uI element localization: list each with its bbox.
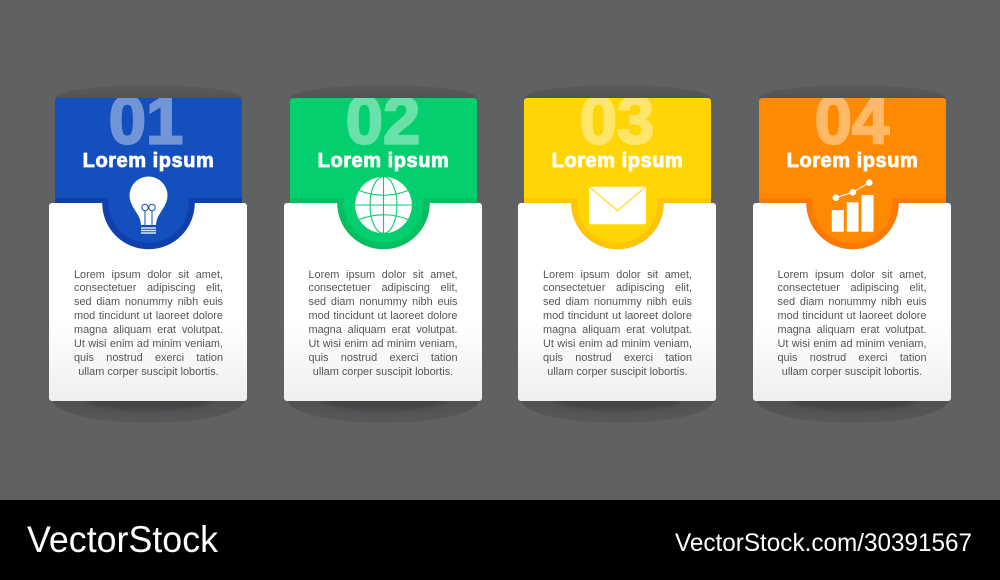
body text: Lorem ipsum dolor sit amet,	[778, 268, 926, 280]
body text: sed diam nonummy nibh euis	[74, 296, 223, 308]
body text: Ut wisi enim ad minim veniam,	[308, 338, 458, 350]
body text	[308, 268, 458, 378]
panel: card 02	[284, 88, 482, 422]
heading: Lorem ipsum	[83, 150, 214, 172]
heading: Lorem ipsum	[552, 150, 683, 172]
number 03: 03	[580, 84, 654, 158]
brand name: VectorStock	[27, 519, 218, 560]
body text: consectetuer adipiscing elit,	[74, 282, 223, 294]
body text: consectetuer adipiscing elit,	[308, 282, 458, 294]
body text: mod tincidunt ut laoreet dolore	[543, 310, 692, 322]
image url: VectorStock.com/30391567	[675, 529, 972, 557]
heading: Lorem ipsum	[786, 150, 918, 172]
body text: consectetuer adipiscing elit,	[778, 282, 926, 294]
body text: consectetuer adipiscing elit,	[543, 282, 692, 294]
body text: sed diam nonummy nibh euis	[778, 296, 926, 308]
body text: sed diam nonummy nibh euis	[543, 296, 692, 308]
body text: ullam corper suscipit lobortis.	[313, 366, 453, 378]
footer bar: watermark	[0, 500, 1000, 580]
number 04: 04	[814, 84, 889, 158]
body text: magna aliquam erat volutpat.	[543, 324, 692, 336]
panel: card 03	[518, 88, 716, 422]
white body panel	[284, 203, 482, 401]
panel: card 04	[753, 88, 951, 422]
body text: Lorem ipsum dolor sit amet,	[308, 268, 458, 280]
body text: Ut wisi enim ad minim veniam,	[543, 338, 692, 350]
body text: ullam corper suscipit lobortis.	[547, 366, 688, 378]
number 01: 01	[109, 84, 183, 158]
body text: magna aliquam erat volutpat.	[308, 324, 458, 336]
body text: magna aliquam erat volutpat.	[778, 324, 926, 336]
header: blue	[55, 98, 242, 249]
body text: ullam corper suscipit lobortis.	[782, 366, 922, 378]
body text: Ut wisi enim ad minim veniam,	[778, 338, 926, 350]
header: orange	[758, 98, 946, 249]
white body panel	[518, 203, 716, 401]
body text: mod tincidunt ut laoreet dolore	[308, 310, 458, 322]
header: yellow	[524, 98, 711, 249]
white body panel	[49, 203, 247, 401]
body text	[74, 268, 223, 378]
icon: globe	[355, 177, 411, 233]
body text: mod tincidunt ut laoreet dolore	[74, 310, 223, 322]
body text: quis nostrud exerci tation	[74, 352, 223, 364]
body text	[778, 268, 926, 378]
body text: ullam corper suscipit lobortis.	[78, 366, 219, 378]
body text: Ut wisi enim ad minim veniam,	[74, 338, 223, 350]
body text: Lorem ipsum dolor sit amet,	[543, 268, 692, 280]
body text: Lorem ipsum dolor sit amet,	[74, 268, 223, 280]
body text: mod tincidunt ut laoreet dolore	[778, 310, 926, 322]
number 02: 02	[345, 84, 420, 158]
body text: quis nostrud exerci tation	[308, 352, 458, 364]
icon: envelope	[589, 187, 646, 224]
heading: Lorem ipsum	[317, 150, 449, 172]
header: green	[290, 98, 476, 249]
body text	[543, 268, 692, 378]
body text: magna aliquam erat volutpat.	[74, 324, 223, 336]
icon: light bulb	[130, 176, 168, 233]
body text: quis nostrud exerci tation	[778, 352, 926, 364]
white body panel	[752, 203, 950, 401]
body text: quis nostrud exerci tation	[543, 352, 692, 364]
body text: sed diam nonummy nibh euis	[308, 296, 458, 308]
panel: card 01	[49, 88, 247, 422]
icon: growth chart	[831, 179, 873, 232]
